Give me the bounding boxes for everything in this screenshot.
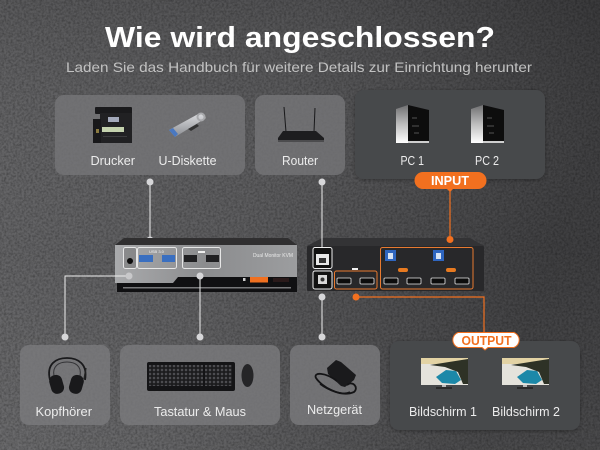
output ports: [334, 268, 377, 289]
keyboard and mouse ports: [182, 248, 220, 268]
connector: output: [352, 294, 484, 334]
badge: OUTPUT: OUTPUT: [462, 334, 512, 348]
badge: OUTPUT: [453, 332, 519, 350]
connector: Tastatur: [196, 272, 204, 340]
panel: Router: [255, 95, 345, 175]
label: PC 1: PC 1: [400, 154, 424, 168]
RJ45 port: [313, 248, 332, 268]
orange button: [250, 277, 268, 282]
USB ports: [138, 248, 176, 268]
label: Netzgerät: Netzgerät: [307, 403, 363, 417]
label: Drucker: Drucker: [90, 154, 135, 168]
panel: INPUT PCs: [355, 90, 545, 179]
icon: power adapter: [316, 360, 356, 394]
label: Kopfhörer: Kopfhörer: [36, 405, 92, 419]
title: Wie wird angeschlossen?: [105, 22, 495, 54]
brand text: Dual Monitor KVM: [253, 253, 293, 259]
panel: OUTPUT Bildschirme: [390, 341, 580, 430]
badge: INPUT: INPUT: [431, 174, 469, 188]
panel: Netzgerät: [290, 345, 380, 425]
icon: USB stick: [169, 113, 206, 137]
icon: headphones: [48, 358, 86, 395]
connector: Drucker to KVM: [146, 178, 154, 244]
label: Bildschirm 1: Bildschirm 1: [409, 405, 477, 419]
icon: monitor 1: [421, 358, 468, 389]
icon: monitor 2: [502, 358, 549, 389]
subtitle: Laden Sie das Handbuch für weitere Details zur Einrichtung herunter: [66, 59, 532, 75]
USB ports: USB 3.0: [149, 249, 165, 254]
icon: router: [278, 107, 324, 142]
input ports: [380, 248, 473, 289]
icon: mouse: [242, 364, 254, 387]
panel: right KVM back: [307, 238, 484, 291]
label: Tastatur & Maus: Tastatur & Maus: [154, 405, 246, 419]
label: Bildschirm 2: Bildschirm 2: [492, 405, 560, 419]
icon: PC 1: [396, 105, 429, 143]
connector: Netzgerät: [318, 294, 326, 340]
power port: [313, 271, 332, 289]
headphone jack: [124, 248, 136, 268]
icon: printer: [93, 107, 132, 143]
panel: Kopfhörer: [20, 345, 110, 425]
connector: Router: [318, 178, 326, 248]
badge: INPUT: [414, 172, 486, 192]
label: PC 2: PC 2: [475, 154, 499, 168]
connector: input: [446, 186, 454, 243]
label: Router: Router: [282, 154, 318, 168]
icon: keyboard: [147, 362, 235, 391]
connector: Kopfhörer: [62, 272, 132, 340]
panel: Tastatur und Maus: [120, 345, 280, 425]
icon: PC 2: [471, 105, 504, 143]
panel: Drucker und U-Diskette: [55, 95, 245, 175]
panel: left KVM front: [115, 238, 297, 292]
label: U-Diskette: U-Diskette: [158, 154, 217, 168]
